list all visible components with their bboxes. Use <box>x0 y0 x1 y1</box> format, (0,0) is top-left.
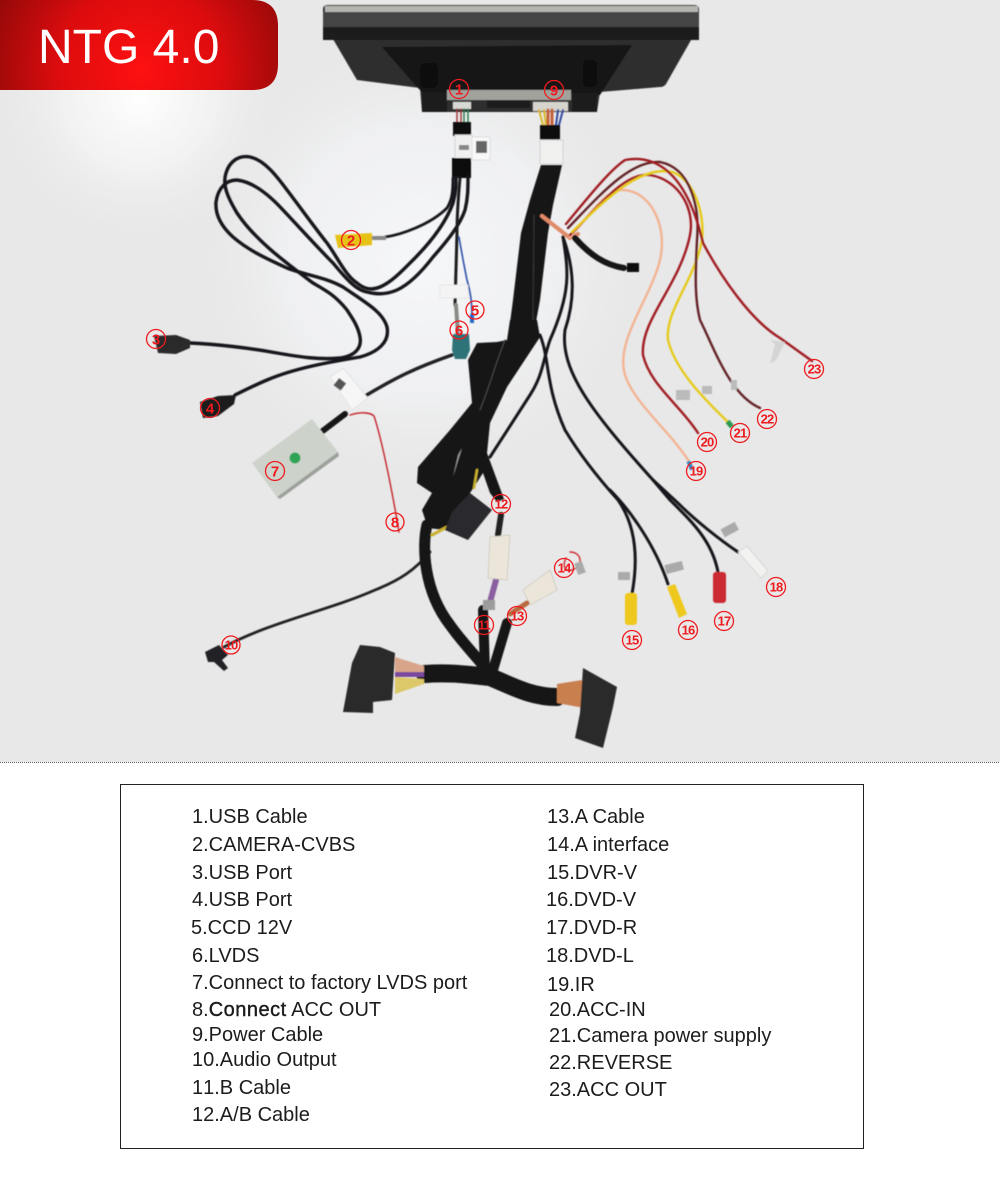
callout 12: 12 <box>495 496 508 512</box>
photo background <box>0 0 1000 762</box>
legend left column: 7.Connect to factory LVDS port <box>192 972 468 994</box>
callout 17 <box>714 612 734 630</box>
callout 8: 8 <box>391 514 399 532</box>
cable to module 7 <box>320 355 452 433</box>
callout 19 <box>686 462 706 480</box>
legend right column: 21.Camera power supply <box>549 1025 771 1047</box>
callout 2: 2 <box>347 232 355 250</box>
title badge <box>0 0 278 90</box>
callout 7 <box>266 462 284 480</box>
callout 17: 17 <box>718 614 731 628</box>
callout 5: 5 <box>471 302 479 320</box>
connector: USB plug 3 <box>154 335 190 354</box>
callout 16 <box>678 620 698 640</box>
legend left column: 3.USB Port <box>192 862 292 884</box>
callout 14: 14 <box>558 560 572 576</box>
legend right column: 14.A interface <box>547 834 669 856</box>
legend left column: 5.CCD 12V <box>191 917 293 939</box>
RCA and black branch wires <box>490 237 738 594</box>
callout 11 <box>474 616 494 634</box>
A/B cable 12 white connector <box>483 515 510 610</box>
legend left column: 10.Audio Output <box>192 1049 337 1071</box>
wire 5 and LVDS branch <box>440 178 474 335</box>
callout 20 <box>698 432 716 452</box>
callout 5 <box>466 301 484 320</box>
legend left column: 4.USB Port <box>192 889 292 911</box>
callout 4 <box>200 398 220 418</box>
callout 23: 23 <box>808 362 821 376</box>
callout 16: 16 <box>682 622 695 638</box>
legend left column <box>191 806 468 1126</box>
callout 18 <box>766 578 786 596</box>
callout 21 <box>730 424 750 442</box>
dotted divider <box>0 762 1000 764</box>
A interface connector 13/14 <box>510 552 586 614</box>
legend left column: 12.A/B Cable <box>192 1104 310 1126</box>
callout 15 <box>622 630 642 650</box>
callout 9: 9 <box>550 82 558 100</box>
head unit screen <box>323 5 699 112</box>
audio output cable 10 <box>205 552 430 671</box>
legend left column: 11.B Cable <box>192 1077 291 1099</box>
callout 14 <box>554 558 574 578</box>
callout 23 <box>804 360 824 378</box>
callout 18: 18 <box>770 580 783 594</box>
title badge: NTG 4.0 <box>38 21 219 74</box>
legend left column: 6.LVDS <box>192 945 259 967</box>
legend right column: 19.IR <box>547 974 595 996</box>
callout 21: 21 <box>734 426 747 440</box>
connector: camera RCA <box>335 233 386 248</box>
callout 1: 1 <box>455 82 463 98</box>
callout 10: 10 <box>225 638 238 652</box>
callout 10 <box>222 636 240 654</box>
callout 6 <box>450 321 468 340</box>
legend right column: 15.DVR-V <box>547 862 638 884</box>
callout 15: 15 <box>626 632 639 648</box>
callout 9 <box>544 80 564 100</box>
legend right column: 16.DVD-V <box>546 889 637 911</box>
callout 20: 20 <box>701 434 714 450</box>
legend left column: 2.CAMERA-CVBS <box>192 834 355 856</box>
callout 13: 13 <box>511 608 524 624</box>
USB cables 3 and 4 <box>190 157 468 395</box>
connector: USB plug 4 <box>200 395 236 418</box>
legend right column: 23.ACC OUT <box>549 1079 667 1101</box>
RCA plugs 15 to 18 <box>618 522 768 625</box>
legend right column <box>546 806 771 1101</box>
legend panel <box>120 784 864 1148</box>
callout 2 <box>342 230 360 250</box>
black module connector <box>445 493 492 540</box>
coloured wires 19 to 23 <box>542 159 812 470</box>
power cable 9 collar and main harness <box>508 102 568 338</box>
number callouts <box>146 80 824 654</box>
legend right column: 20.ACC-IN <box>549 999 646 1021</box>
callout 3: 3 <box>152 332 160 348</box>
cable 1 collar and branches <box>452 102 490 178</box>
callout 7: 7 <box>271 464 279 480</box>
legend left column: 1.USB Cable <box>192 806 308 828</box>
callout 22 <box>758 410 776 428</box>
callout 12 <box>492 494 510 514</box>
LVDS module 7 <box>252 419 339 499</box>
legend right column: 18.DVD-L <box>546 945 634 967</box>
callout 22: 22 <box>761 412 774 426</box>
legend left column: 8.Connect ACC OUT <box>192 999 381 1021</box>
legend right column: 17.DVD-R <box>546 917 637 939</box>
callout 8 <box>386 513 404 532</box>
callout 19: 19 <box>690 464 703 478</box>
black stub connector <box>575 238 639 272</box>
red wire 8 <box>350 413 399 532</box>
callout 6: 6 <box>455 322 463 340</box>
callout 3 <box>146 330 166 348</box>
bottom harness with connectors <box>343 610 617 748</box>
coiled harness bundle <box>417 320 540 670</box>
wiring photo illustration <box>154 5 812 748</box>
callout 1 <box>450 80 468 98</box>
legend right column: 22.REVERSE <box>549 1052 672 1074</box>
legend right column: 13.A Cable <box>547 806 645 828</box>
LVDS connector 6 <box>452 334 470 359</box>
callout 13 <box>508 606 526 626</box>
legend left column: 9.Power Cable <box>192 1024 323 1046</box>
callout 11: 11 <box>478 618 491 632</box>
callout 4: 4 <box>206 400 215 418</box>
